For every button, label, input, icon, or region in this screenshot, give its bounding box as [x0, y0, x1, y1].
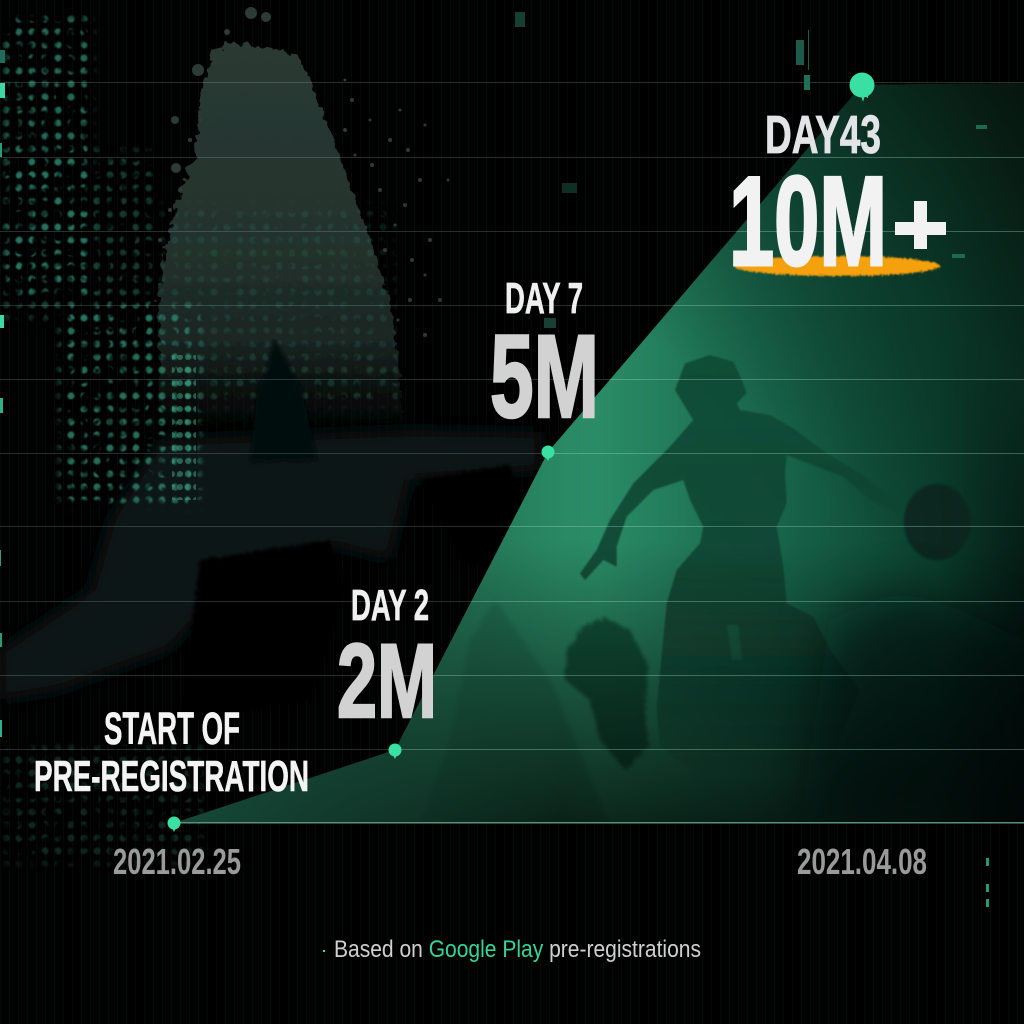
chart grid lines over area — [401, 157, 1024, 750]
value: 10M: 10M — [729, 150, 887, 292]
label: day 43: DAY43 — [765, 105, 881, 165]
soldier silhouette — [467, 354, 988, 806]
label: pre-registration: PRE-REGISTRATION — [34, 752, 309, 801]
footnote bullet — [323, 950, 325, 952]
orange highlight — [734, 256, 940, 276]
debris: right shadow — [802, 578, 988, 806]
point marker: day 2 — [388, 744, 402, 759]
value: plus sign — [895, 201, 946, 249]
baseline axis — [174, 822, 1024, 824]
horizontal grid lines — [0, 82, 1024, 750]
date: start: 2021.02.25 — [113, 841, 241, 882]
value: 5M: 5M — [490, 311, 599, 443]
background figure: pale hooded shape — [158, 42, 405, 440]
label: day 7: DAY 7 — [505, 274, 583, 323]
label: start of: START OF — [104, 703, 240, 754]
point marker: day 43 — [850, 72, 874, 102]
date: end: 2021.04.08 — [797, 841, 927, 882]
figure: splatter dots — [158, 7, 450, 337]
area vertical fade — [174, 83, 1024, 823]
area chart — [174, 83, 1024, 823]
label: day 2: DAY 2 — [351, 581, 429, 630]
halftone dot field — [0, 0, 400, 900]
area left tint — [174, 83, 1024, 823]
value: 2M: 2M — [337, 623, 437, 740]
footnote: Based on Google Play pre-registrations — [334, 936, 701, 963]
debris: dark bush — [565, 618, 650, 770]
debris: rock mass — [467, 604, 572, 752]
gap between legs — [727, 625, 742, 660]
background figure: dim lower mass — [0, 430, 540, 700]
point marker: start — [168, 816, 180, 832]
bag silhouette — [904, 484, 970, 560]
point marker: day 7 — [542, 446, 554, 461]
figure: dark silhouette inside pale shape — [180, 340, 520, 720]
